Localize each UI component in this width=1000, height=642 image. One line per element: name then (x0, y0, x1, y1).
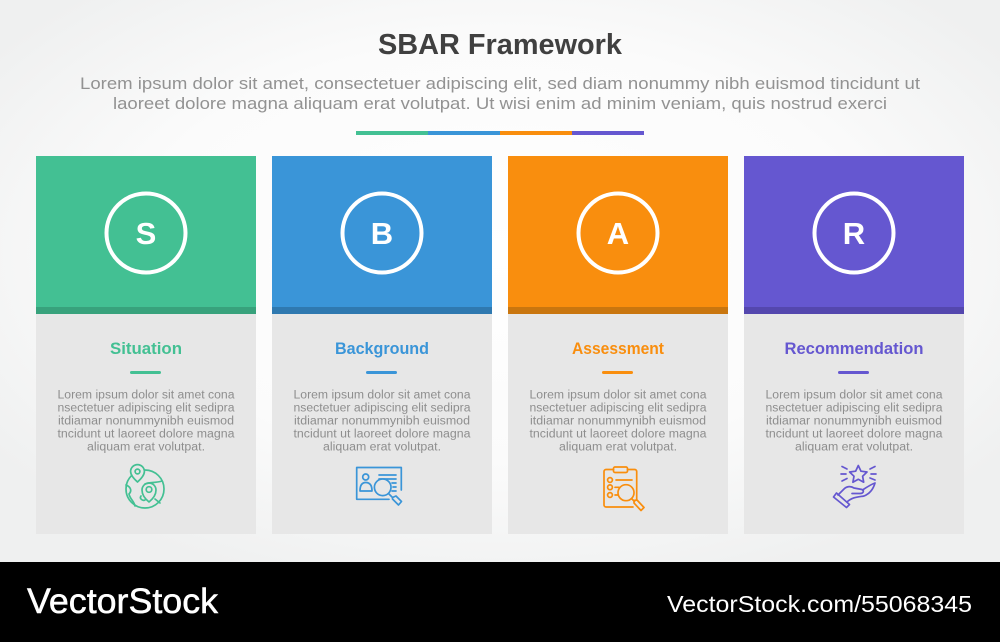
body text: situation (58, 390, 235, 454)
intro text: laoreet dolore magna aliquam erat volutpat. Ut wisi enim ad minim veniam, quis nostrud exerci (113, 94, 887, 113)
heading: recommendation: Recommendation (784, 339, 924, 358)
body text: recommendation: Lorem ipsum dolor sit amet cona (766, 390, 943, 402)
body text: assessment: aliquam erat volutpat. (559, 442, 677, 454)
body text: assessment (530, 390, 707, 454)
intro text (80, 74, 920, 113)
icon: clipboard with magnifier (604, 467, 644, 510)
body text: recommendation: tncidunt ut laoreet dolore magna (766, 428, 943, 440)
body text: situation: aliquam erat volutpat. (87, 442, 205, 454)
letter badge S (106, 194, 186, 272)
body text: background (294, 390, 471, 454)
body text: background: tncidunt ut laoreet dolore magna (294, 428, 471, 440)
body text: assessment: itdiamar nonummynibh euismod (530, 416, 706, 428)
letter badge A: A (607, 216, 629, 251)
colour divider (356, 131, 644, 135)
body text: situation: Lorem ipsum dolor sit amet cona (58, 390, 235, 402)
footer bar (0, 562, 1000, 642)
heading: background: Background (335, 339, 429, 358)
panel: recommendation (744, 156, 964, 534)
panel: assessment (508, 156, 728, 534)
body text: background: aliquam erat volutpat. (323, 442, 441, 454)
title: SBAR Framework (378, 29, 623, 61)
body text: background: itdiamar nonummynibh euismod (294, 416, 470, 428)
heading: situation: Situation (110, 339, 182, 358)
intro text: Lorem ipsum dolor sit amet, consectetuer adipiscing elit, sed diam nonummy nibh euismod tincidunt ut (80, 74, 920, 93)
body text: situation: tncidunt ut laoreet dolore magna (58, 428, 235, 440)
letter badge A (578, 194, 658, 272)
body text: situation: nsectetuer adipiscing elit sedipra (58, 402, 235, 414)
body text: assessment: Lorem ipsum dolor sit amet cona (530, 390, 707, 402)
letter badge B (342, 194, 422, 272)
body text: assessment: nsectetuer adipiscing elit sedipra (530, 402, 707, 414)
letter badge S: S (136, 216, 156, 251)
body text: assessment: tncidunt ut laoreet dolore magna (530, 428, 707, 440)
panel: situation (36, 156, 256, 534)
body text: background: nsectetuer adipiscing elit sedipra (294, 402, 471, 414)
letter badge R (814, 194, 894, 272)
body text: situation: itdiamar nonummynibh euismod (58, 416, 234, 428)
footer image id: VectorStock.com/55068345 (667, 591, 972, 617)
icon: profile document with magnifier (357, 468, 402, 505)
icon: hand holding star (834, 466, 876, 508)
icon: globe with pins (126, 465, 164, 508)
heading: assessment: Assessment (572, 339, 664, 358)
letter badge R: R (843, 216, 865, 251)
footer logo: VectorStock (27, 582, 219, 621)
letter badge B: B (371, 216, 393, 251)
body text: background: Lorem ipsum dolor sit amet cona (294, 390, 471, 402)
body text: recommendation (766, 390, 943, 454)
body text: recommendation: aliquam erat volutpat. (795, 442, 913, 454)
panel: background (272, 156, 492, 534)
body text: recommendation: itdiamar nonummynibh euismod (766, 416, 942, 428)
body text: recommendation: nsectetuer adipiscing elit sedipra (766, 402, 943, 414)
